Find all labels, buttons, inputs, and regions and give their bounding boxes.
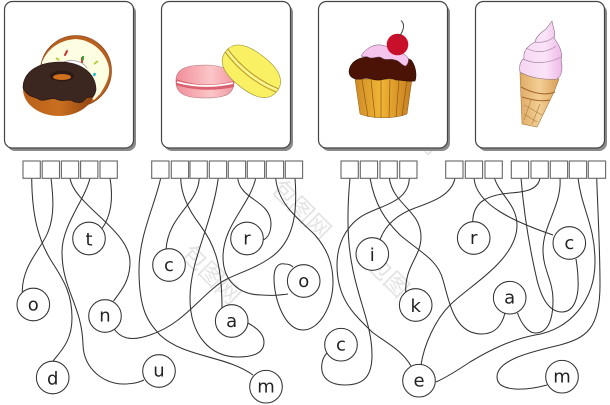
answer boxes: donut bbox=[23, 161, 117, 178]
letter c bbox=[553, 227, 586, 259]
letter r bbox=[457, 222, 490, 254]
icon: ice cream cone bbox=[520, 21, 562, 127]
icon: cupcake bbox=[349, 20, 416, 118]
letter e bbox=[403, 364, 435, 397]
letter m bbox=[546, 360, 578, 393]
letter i: i bbox=[370, 245, 375, 266]
letter k bbox=[399, 289, 432, 321]
letter c bbox=[153, 249, 185, 281]
icon: macarons bbox=[176, 36, 289, 106]
watermark: 包图网 bbox=[176, 240, 246, 310]
panel: donut card bbox=[4, 2, 136, 151]
letter a: a bbox=[504, 288, 515, 308]
answer boxes: cupcake bbox=[341, 161, 417, 178]
letter n bbox=[89, 300, 121, 332]
letter o: o bbox=[298, 271, 309, 292]
letter r: r bbox=[470, 228, 478, 249]
letter c: c bbox=[336, 334, 346, 356]
answer boxes: ice cream bbox=[446, 161, 606, 178]
letter o bbox=[17, 288, 50, 321]
letter t bbox=[73, 222, 105, 255]
letter c: c bbox=[564, 233, 574, 254]
letter m bbox=[250, 370, 282, 403]
letter o: o bbox=[28, 294, 39, 316]
letter a: a bbox=[226, 311, 237, 332]
panel: ice cream card bbox=[476, 2, 607, 151]
watermark bbox=[176, 78, 446, 320]
watermark: 包图网 bbox=[266, 175, 336, 245]
letter i bbox=[356, 238, 389, 270]
letter a bbox=[493, 281, 526, 314]
icon: donuts bbox=[23, 36, 112, 116]
letter n: n bbox=[99, 306, 111, 326]
letter a bbox=[215, 305, 248, 337]
watermark: 包图网 bbox=[376, 90, 446, 160]
letter r bbox=[231, 222, 263, 255]
letter u: u bbox=[153, 360, 165, 382]
panel: cupcake card bbox=[318, 2, 450, 151]
watermark: 包图网 bbox=[361, 250, 431, 320]
letter m: m bbox=[553, 366, 571, 388]
panel: macaron card bbox=[162, 2, 293, 151]
letter m: m bbox=[257, 376, 275, 398]
letter k: k bbox=[410, 296, 421, 317]
letter o bbox=[287, 265, 320, 297]
letter c: c bbox=[164, 255, 174, 276]
connecting lines bbox=[22, 178, 600, 389]
letter r: r bbox=[243, 228, 251, 250]
letter e: e bbox=[413, 370, 425, 392]
letter circles bbox=[17, 222, 586, 403]
letter t: t bbox=[85, 230, 93, 250]
letter d bbox=[36, 361, 69, 394]
letter u bbox=[143, 355, 175, 387]
letter d: d bbox=[47, 368, 58, 390]
watermark: 包图网 bbox=[186, 78, 256, 148]
answer boxes: macaron bbox=[152, 161, 303, 178]
letter c bbox=[325, 328, 357, 361]
